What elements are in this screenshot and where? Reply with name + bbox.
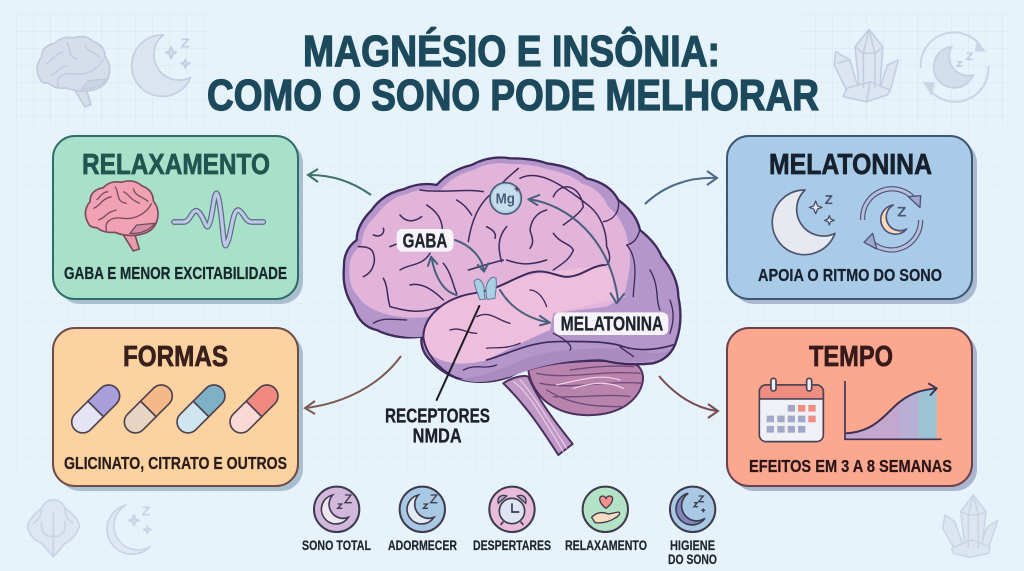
icon: capsules bbox=[67, 380, 282, 437]
callout line: receptores bbox=[437, 306, 479, 400]
icon: magnesium ion: Mg bbox=[496, 192, 515, 208]
heading: relaxamento: RELAXAMENTO bbox=[82, 149, 270, 181]
icon: calendar bbox=[759, 378, 823, 442]
heading: melatonina: MELATONINA bbox=[769, 149, 932, 181]
icon: despertares bbox=[489, 487, 535, 532]
labels: bottom row: DO SONO bbox=[668, 552, 717, 567]
icon: magnesium ion: + bbox=[514, 185, 520, 196]
icon: faded leaf brain bottom left bbox=[27, 500, 79, 557]
labels: bottom row: RELAXAMENTO bbox=[565, 538, 647, 553]
cerebrum bbox=[344, 157, 680, 382]
title: COMO O SONO PODE MELHORAR bbox=[207, 71, 819, 120]
icon: faded crystal bottom right bbox=[943, 495, 998, 557]
icon: nmda receptor bbox=[474, 277, 496, 299]
panel: melatonina bbox=[727, 136, 977, 304]
caption: tempo: EFEITOS EM 3 A 8 SEMANAS bbox=[749, 456, 952, 476]
icon: faded crystal top right bbox=[834, 29, 898, 102]
panel: relaxamento bbox=[53, 136, 303, 304]
caption: formas: GLICINATO, CITRATO E OUTROS bbox=[64, 453, 287, 473]
icon: faded sleep cycle top right bbox=[921, 32, 988, 102]
heading: tempo: TEMPO bbox=[809, 341, 893, 373]
icon: pink brain bbox=[85, 181, 158, 251]
label: receptores nmda: NMDA bbox=[413, 425, 462, 447]
label: melatonina: MELATONINA bbox=[561, 314, 663, 336]
icon: relaxamento hand and heart bbox=[583, 487, 628, 532]
sulci bbox=[423, 265, 603, 337]
arrow: to formas bbox=[305, 356, 401, 414]
arrow: to melatonina bbox=[645, 171, 717, 204]
label: receptores nmda: RECEPTORES bbox=[385, 406, 490, 428]
icon: faded moon top left bbox=[132, 35, 191, 96]
icon: higiene do sono bbox=[670, 487, 715, 532]
label: receptores nmda bbox=[385, 406, 490, 447]
caption: relaxamento: GABA E MENOR EXCITABILIDADE bbox=[64, 263, 287, 283]
labels: bottom row: DESPERTARES bbox=[473, 538, 551, 553]
labels: bottom row bbox=[302, 538, 717, 567]
icon: sleep cycle bbox=[863, 189, 921, 250]
title bbox=[207, 25, 819, 120]
bottom icon row bbox=[302, 487, 717, 567]
labels: bottom row: ADORMECER bbox=[388, 538, 457, 553]
label: gaba: GABA bbox=[403, 231, 447, 253]
title: MAGNÉSIO E INSÔNIA: bbox=[303, 25, 720, 76]
icon: faded brain top left bbox=[37, 37, 110, 107]
icon: magnesium ion bbox=[490, 183, 521, 214]
central brain illustration bbox=[344, 157, 680, 455]
icon: sono total bbox=[314, 487, 359, 532]
arrow: to relaxamento bbox=[308, 169, 371, 195]
panel: tempo bbox=[727, 328, 977, 491]
labels: bottom row: SONO TOTAL bbox=[302, 538, 371, 553]
icon: faded moon bottom left bbox=[107, 505, 151, 554]
icon: moon and stars bbox=[772, 190, 835, 255]
brain stem bbox=[503, 376, 573, 455]
cerebellum bbox=[528, 361, 643, 415]
labels: bottom row: HIGIENE bbox=[670, 538, 715, 553]
arrows: brain pathways bbox=[428, 195, 624, 325]
panel: formas bbox=[53, 328, 303, 491]
arrow: to tempo bbox=[659, 376, 718, 418]
chart: effect over time bbox=[845, 381, 942, 439]
heading: formas: FORMAS bbox=[123, 341, 228, 373]
caption: melatonina: APOIA O RITMO DO SONO bbox=[758, 265, 942, 285]
icon: adormecer bbox=[400, 487, 445, 532]
icon: brain wave bbox=[174, 193, 263, 246]
